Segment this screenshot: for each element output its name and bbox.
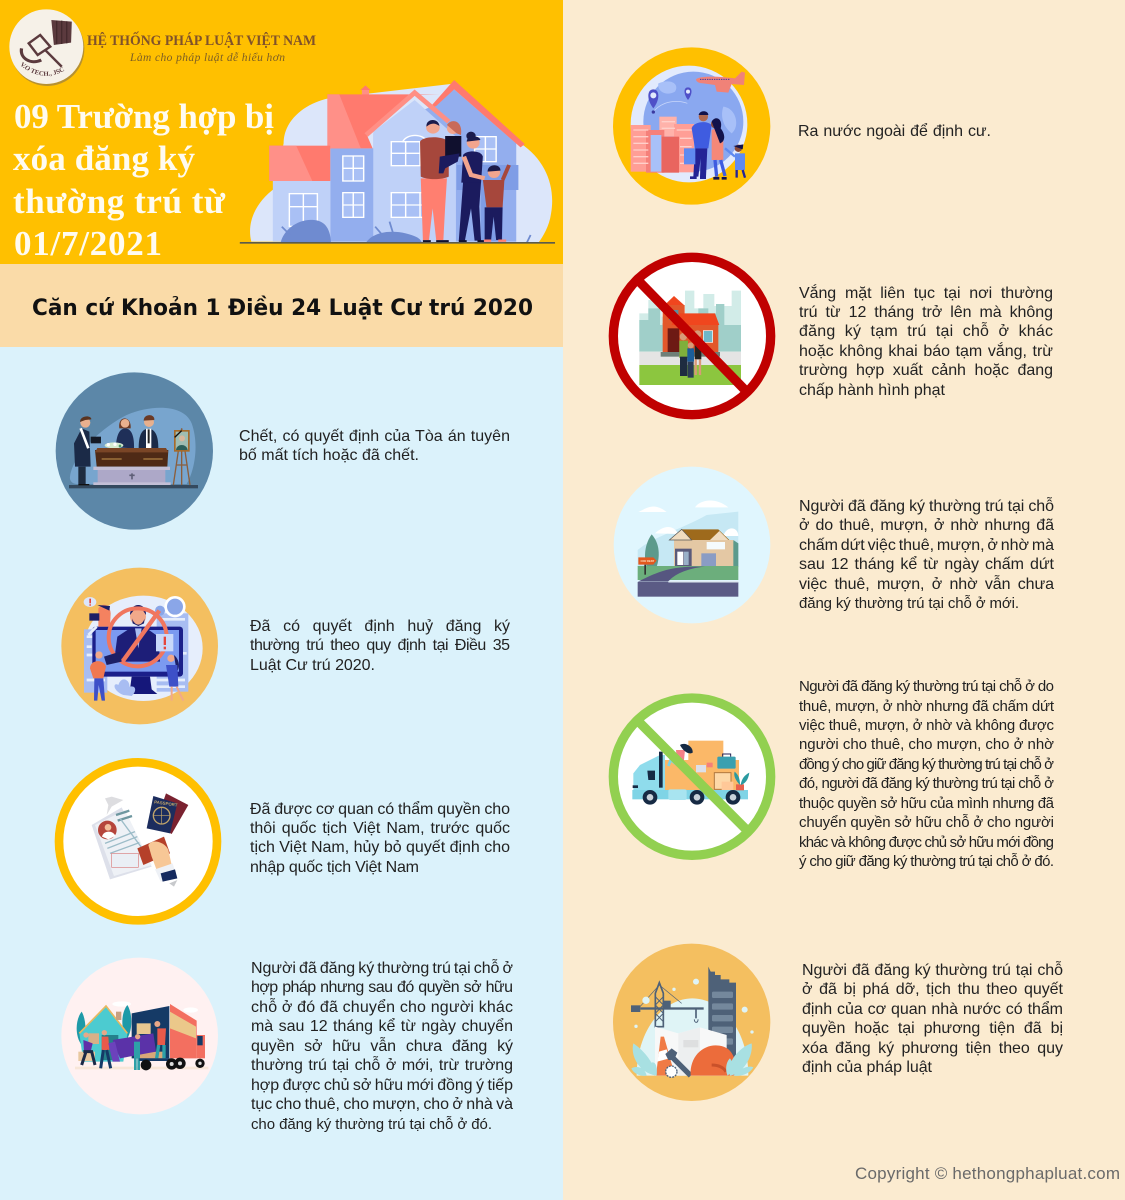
- panel: left column background: [0, 347, 563, 1200]
- icon: passport and stamp: PASSPORT: [154, 799, 178, 808]
- text: right case 4: ý cho giữ đăng ký thường trú tại chỗ ở đó.: [799, 853, 1054, 870]
- text: case 4: cho đăng ký thường trú tại chỗ ở đó.: [251, 1116, 492, 1133]
- mother: [459, 132, 485, 242]
- text: case 4: tục cho thuê, cho mượn, cho ở nhà và: [251, 1096, 513, 1113]
- title: xóa đăng ký: [13, 139, 196, 178]
- text: right case 3: việc thuê, mượn, ở nhờ vẫn chưa: [799, 574, 1054, 593]
- text: right case 3: [799, 496, 1055, 612]
- text: case 3: thôi quốc tịch Việt Nam, trước quốc: [250, 820, 510, 837]
- text: case 2: Luật Cư trú 2020.: [250, 657, 375, 674]
- icon: cancelled registration: [61, 568, 218, 724]
- panel: right column background: [563, 0, 1125, 1200]
- text: right case 4: chuyển quyền sở hữu chỗ ở cho người: [799, 814, 1054, 831]
- text: right case 4: [799, 678, 1055, 870]
- text: right case 2: [799, 283, 1053, 399]
- text: right case 2: hoặc không khai báo tạm vắng, trừ: [799, 341, 1053, 360]
- text: right case 4: việc thuê, mượn, ở nhờ và không được: [799, 717, 1054, 734]
- text: right case 5: định của pháp luật: [802, 1059, 933, 1076]
- logo wordmark: [87, 31, 316, 64]
- text: right case 5: [802, 960, 1064, 1076]
- illustration: family in front of house: [240, 80, 555, 244]
- text: right case 2: trường hợp xuất cảnh hoặc đang: [799, 362, 1053, 379]
- text: case 1: [239, 428, 510, 464]
- text: right case 4: đó, người đã đăng ký thường trú tại chỗ ở: [799, 775, 1054, 792]
- text: case 4: Người đã đăng ký thường trú tại chỗ ở: [251, 958, 514, 977]
- text: right case 2: Vắng mặt liên tục tại nơi thường: [799, 283, 1053, 302]
- title: 09 Trường hợp bị: [14, 97, 274, 136]
- text: right case 3: sau 12 tháng kể từ ngày chấm dứt: [799, 555, 1055, 573]
- text: right case 5: định của cơ quan nhà nước có thẩm: [802, 1000, 1063, 1018]
- text: right case 3: ở do thuê, mượn, ở nhờ nhưng đã: [799, 517, 1054, 534]
- icon: demolition and construction: [613, 944, 770, 1101]
- text: right case 4: thuê, mượn, ở nhờ nhưng đã chấm dứt: [799, 698, 1055, 715]
- icon: family emigrating: [613, 47, 770, 205]
- logo: gavel and books seal: V.O TECH., JSC: [21, 62, 64, 76]
- icon: funeral: [56, 372, 213, 530]
- text: case 3: nhập quốc tịch Việt Nam: [250, 859, 419, 876]
- icon: moving truck: [61, 958, 218, 1114]
- text: right case 3: chấm dứt việc thuê, mượn, ở nhờ mà: [799, 537, 1054, 554]
- father with child: [420, 120, 461, 242]
- text: case 4: thường trú tại chỗ ở mới, trừ trường: [251, 1055, 513, 1074]
- logo: gavel and books seal: [9, 9, 84, 86]
- text: right case 4: thuộc quyền sở hữu của mình nhưng đã: [799, 795, 1055, 812]
- text: case 4: hợp pháp nhưng sau đó quyền sở hữu: [251, 979, 513, 996]
- text: case 4: [251, 958, 514, 1133]
- title: thường trú từ: [13, 182, 226, 221]
- text: case 2: thường trú theo quy định tại Điều 35: [250, 637, 510, 654]
- text: right case 2: đăng ký tạm trú tại chỗ ở khác: [799, 321, 1053, 340]
- child: [483, 165, 509, 241]
- text: case 1: Chết, có quyết định của Tòa án tuyên: [239, 428, 510, 445]
- logo wordmark: HỆ THỐNG PHÁP LUẬT VIỆT NAM: [87, 31, 316, 49]
- text: right case 4: người cho thuê, cho mượn, cho ở nhờ: [799, 736, 1054, 753]
- panel: legal basis band: [0, 264, 563, 347]
- text: case 3: Đã được cơ quan có thẩm quyền cho: [250, 800, 510, 818]
- panel: header: [0, 0, 563, 264]
- text: case 1: bố mất tích hoặc đã chết.: [239, 447, 419, 464]
- text: case 4: hợp được chủ sở hữu mới đồng ý tiếp: [251, 1077, 513, 1094]
- text: right case 4: đồng ý cho giữ đăng ký thường trú tại chỗ ở: [799, 756, 1054, 773]
- title: [13, 97, 274, 263]
- text: right case 5: xóa đăng ký phương tiện theo quy: [802, 1040, 1063, 1057]
- text: case 4: mà sau 12 tháng kể từ ngày chuyển: [251, 1017, 513, 1035]
- logo wordmark: Làm cho pháp luật dễ hiểu hơn: [129, 51, 285, 64]
- text: case 2: Đã có quyết định huỷ đăng ký: [250, 618, 510, 635]
- text: right case 2: trú từ 12 tháng trở lên mà không: [799, 304, 1053, 321]
- copyright: Copyright © hethongphapluat.com: [855, 1164, 1120, 1183]
- text: right case 5: quyền hoặc tại phương tiện đã bị: [802, 1020, 1063, 1037]
- text: right case 4: khác và không được chủ sở hữu mới đồng: [799, 834, 1054, 851]
- text: case 4: quyền sở hữu vẫn chưa đăng ký: [251, 1036, 513, 1055]
- text: case 3: tịch Việt Nam, hủy bỏ quyết định cho: [250, 839, 510, 856]
- text: right case 5: ở đã bị phá dỡ, tịch thu theo quyết: [802, 981, 1064, 998]
- text: right case 3: đăng ký thường trú tại chỗ ở mới.: [799, 595, 1019, 612]
- text: right case 2: chấp hành hình phạt: [799, 382, 946, 399]
- title: 01/7/2021: [14, 224, 162, 263]
- icon: house for rent: [614, 467, 770, 623]
- text: right case 1: Ra nước ngoài để định cư.: [798, 122, 991, 140]
- text: right case 3: Người đã đăng ký thường trú tại chỗ: [799, 496, 1054, 515]
- icon: passport and stamp: [59, 762, 217, 920]
- text: case 2: [250, 618, 510, 674]
- icon: prohibited moving truck: [613, 698, 771, 855]
- text: right case 5: Người đã đăng ký thường trú tại chỗ: [802, 960, 1063, 979]
- icon: house for rent: FOR RENT: [641, 559, 655, 563]
- text: right case 4: Người đã đăng ký thường trú tại chỗ ở do: [799, 678, 1054, 695]
- text: case 4: chỗ ở đó đã chuyển cho người khác: [251, 997, 513, 1016]
- icon: prohibited home: [613, 257, 771, 415]
- text: case 3: [250, 800, 510, 876]
- heading: legal basis: Căn cứ Khoản 1 Điều 24 Luật Cư trú 2020: [32, 294, 533, 321]
